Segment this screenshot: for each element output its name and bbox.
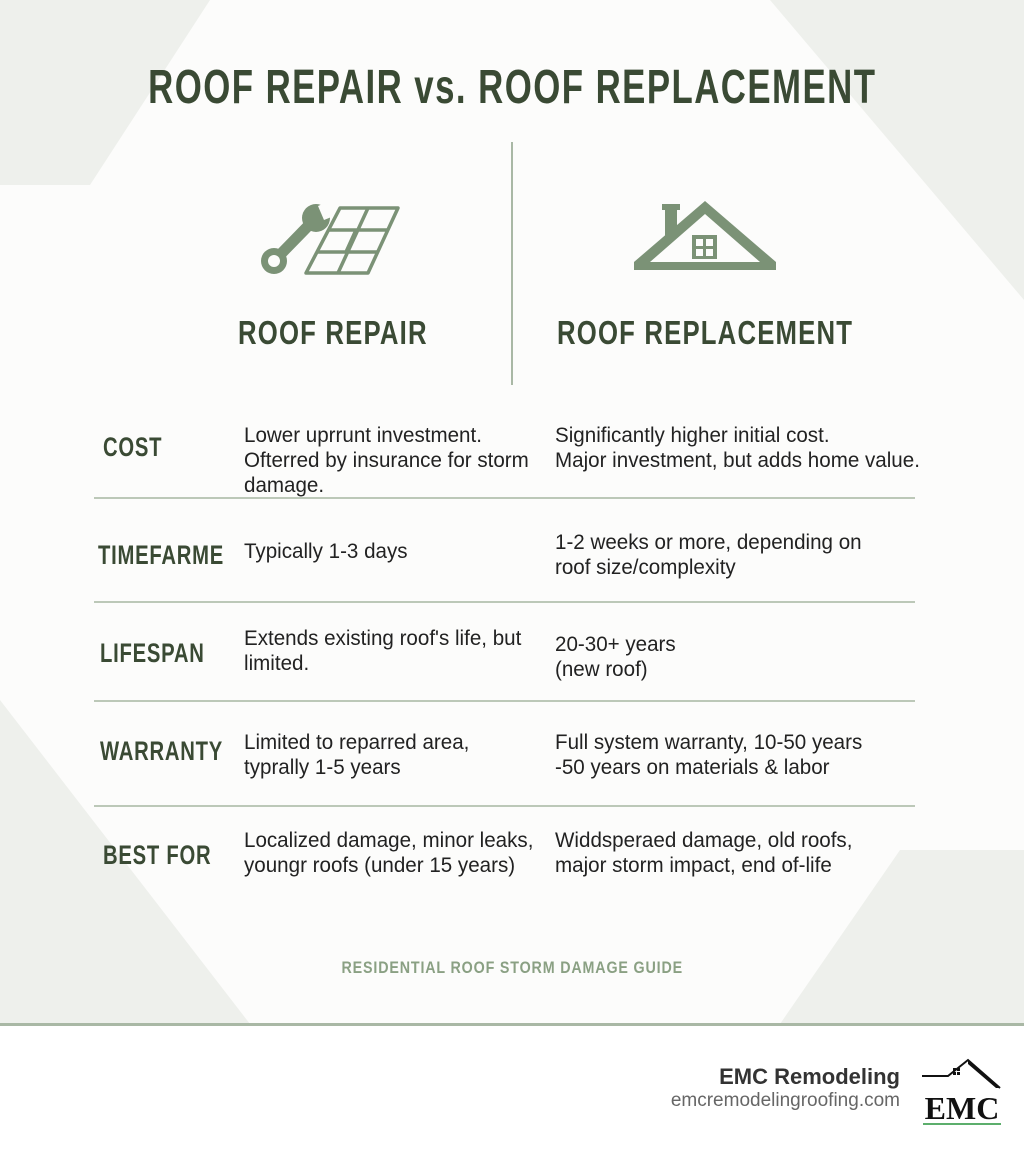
title: ROOF REPAIR vs. ROOF REPLACEMENT — [148, 61, 876, 114]
heading: roof repair: ROOF REPAIR — [238, 314, 428, 351]
row: best for: major storm impact, end of-life — [555, 854, 832, 877]
row: lifespan: 20-30+ years — [555, 633, 676, 656]
row: cost: Significantly higher initial cost. — [555, 424, 830, 447]
logo — [922, 1058, 1001, 1126]
row: lifespan: Extends existing roof's life, but — [244, 627, 521, 650]
row: cost: Lower uprrunt investment. — [244, 424, 482, 447]
row: timeframe: 1-2 weeks or more, depending on — [555, 531, 862, 554]
row: cost: Ofterred by insurance for storm — [244, 449, 529, 472]
row: best for: BEST FOR — [103, 840, 211, 870]
heading: roof replacement: ROOF REPLACEMENT — [557, 314, 853, 351]
row: timeframe: roof size/complexity — [555, 556, 736, 579]
icon: wrench and shingles — [261, 204, 400, 275]
row: warranty: Full system warranty, 10-50 years — [555, 731, 862, 754]
icon: house — [634, 201, 776, 270]
divider vertical — [511, 142, 513, 385]
brand text — [671, 1064, 900, 1111]
row: timeframe: TIMEFARME — [98, 540, 224, 570]
row: timeframe: Typically 1-3 days — [244, 540, 408, 563]
row: cost: COST — [103, 432, 162, 462]
row: best for: Widdsperaed damage, old roofs, — [555, 829, 852, 852]
row: cost: Major investment, but adds home value. — [555, 449, 920, 472]
row: lifespan: limited. — [244, 652, 309, 675]
row: best for: youngr roofs (under 15 years) — [244, 854, 515, 877]
brand text: EMC Remodeling — [719, 1064, 900, 1089]
row: warranty: Limited to reparred area, — [244, 731, 469, 754]
brand text: emcremodelingroofing.com — [671, 1090, 900, 1111]
row: warranty: -50 years on materials & labor — [555, 756, 830, 779]
row: lifespan: LIFESPAN — [100, 638, 205, 668]
row: warranty: typrally 1-5 years — [244, 756, 401, 779]
row: cost: damage. — [244, 474, 324, 497]
row: timeframe — [98, 531, 862, 579]
logo: EMC — [925, 1090, 999, 1126]
row: lifespan: (new roof) — [555, 658, 648, 681]
row: lifespan — [100, 627, 676, 681]
footer caption: RESIDENTIAL ROOF STORM DAMAGE GUIDE — [341, 958, 683, 977]
row: best for — [103, 829, 852, 877]
row: warranty: WARRANTY — [100, 736, 223, 766]
row: cost — [103, 424, 920, 497]
footer line — [0, 1023, 1024, 1026]
row: best for: Localized damage, minor leaks, — [244, 829, 533, 852]
row: warranty — [100, 731, 862, 779]
